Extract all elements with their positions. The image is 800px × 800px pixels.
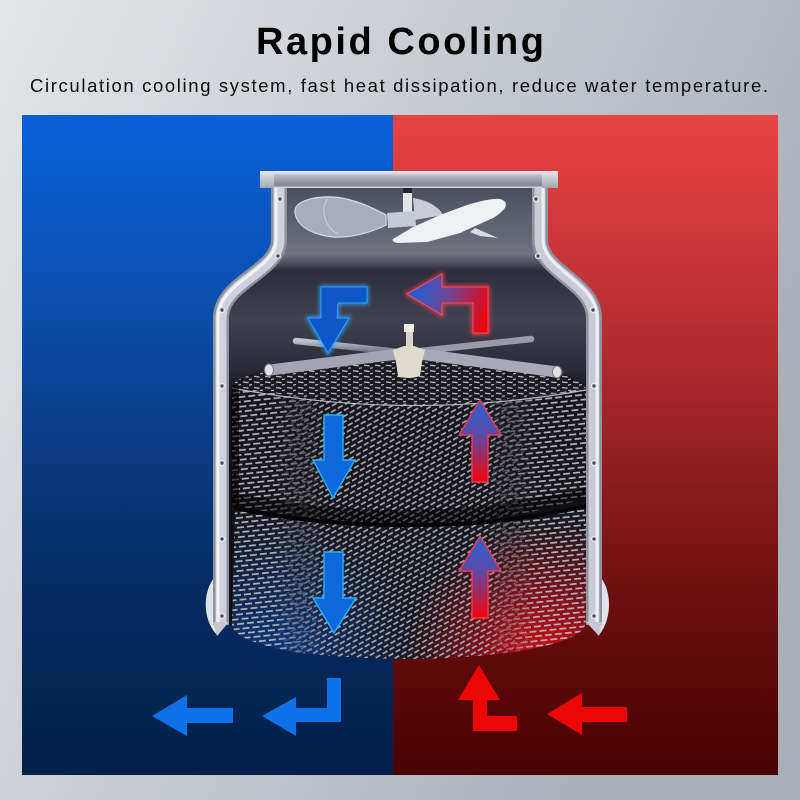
side fins xyxy=(206,578,609,635)
rivets xyxy=(220,197,596,618)
arrow: down lower drum xyxy=(313,552,356,633)
cooling tower xyxy=(206,171,609,670)
title: Rapid Cooling xyxy=(256,21,544,63)
panel: hot side background xyxy=(393,115,778,775)
subtitle: Circulation cooling system, fast heat dissipation, reduce water temperature. xyxy=(30,75,768,96)
arrow: hot inlet bent xyxy=(458,665,517,731)
arrow: cold bent into tower xyxy=(308,287,367,353)
arrow: up upper drum xyxy=(459,400,501,482)
gap between drums xyxy=(232,504,586,527)
spray arms xyxy=(264,339,562,378)
arrow: cold outlet xyxy=(152,695,233,736)
left wall xyxy=(218,188,279,625)
fan xyxy=(295,188,506,243)
tower interior xyxy=(214,188,602,625)
arrow: down upper drum xyxy=(313,415,355,498)
arrow: cold outlet bent xyxy=(262,678,341,736)
arrow: up lower drum xyxy=(459,536,501,618)
lower fill drum xyxy=(232,508,586,659)
right wall xyxy=(540,188,597,625)
wall tips xyxy=(213,622,602,636)
top cap xyxy=(260,171,558,188)
arrow: hot bent into tower xyxy=(407,274,488,333)
arrow: hot inlet xyxy=(547,693,627,735)
upper fill drum xyxy=(225,360,595,530)
panel: cold side background xyxy=(22,115,393,775)
central nozzle xyxy=(393,324,425,378)
